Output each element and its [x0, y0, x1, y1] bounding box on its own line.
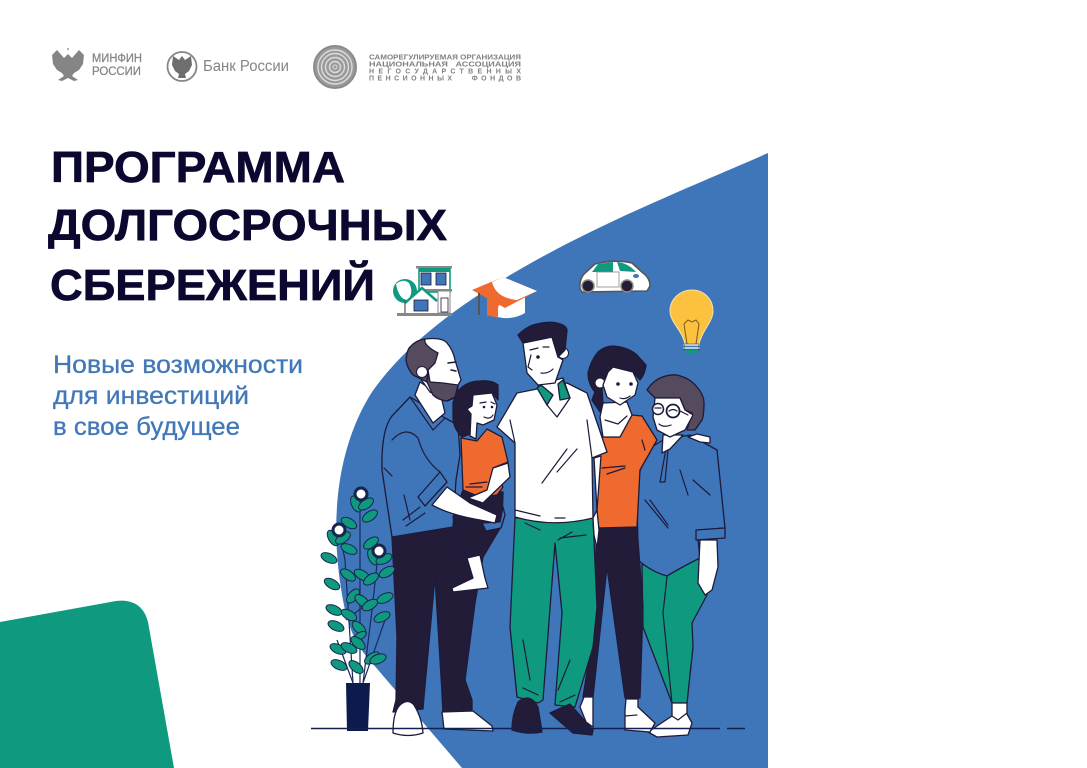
person: bearded man: [382, 338, 493, 736]
icon: light bulb: [670, 290, 713, 353]
subtitle: [53, 351, 303, 441]
plant coins: [333, 488, 385, 557]
logo: НАПФ: НАЦИОНАЛЬНАЯ АССОЦИАЦИЯ: [369, 62, 521, 68]
subtitle: для инвестиций: [53, 382, 249, 410]
logo: НАПФ: САМОРЕГУЛИРУЕМАЯ ОРГАНИЗАЦИЯ: [369, 54, 521, 62]
logos row: [52, 46, 521, 88]
icon: house: [393, 266, 452, 316]
logo: Банк России: Банк России: [203, 58, 289, 75]
icon: car: [580, 261, 650, 292]
plant with coins: [319, 488, 397, 731]
logo: НАПФ: НЕГОСУДАРСТВЕННЫХ: [369, 68, 521, 76]
person: child: [452, 381, 510, 592]
logo: Банк России: [168, 52, 289, 81]
logo: НАПФ: [314, 46, 521, 88]
subtitle: в свое будущее: [53, 413, 240, 441]
logo: Минфин России: МИНФИН: [92, 53, 142, 65]
person: man's holding arm: [432, 487, 505, 531]
title: ДОЛГОСРОЧНЫХ: [48, 201, 447, 250]
title: ПРОГРАММА: [51, 143, 345, 192]
illustration: family: [382, 322, 725, 737]
logo: Минфин России: РОССИИ: [92, 66, 141, 78]
title: [48, 143, 447, 310]
blue background shape: [336, 153, 768, 768]
person: older woman: [637, 375, 725, 737]
logo: НАПФ: ПЕНСИОННЫХ ФОНДОВ: [369, 76, 521, 82]
person: woman: [580, 346, 657, 732]
ground line: [311, 728, 745, 730]
green corner shape: [0, 601, 174, 768]
plant pot: [346, 683, 370, 731]
icon: graduation cap: [472, 277, 537, 318]
subtitle: Новые возможности: [53, 351, 303, 379]
plant leaves: [319, 494, 397, 676]
title: СБЕРЕЖЕНИЙ: [50, 259, 375, 310]
logo: Минфин России: [52, 48, 142, 81]
person: centre man: [497, 322, 607, 735]
